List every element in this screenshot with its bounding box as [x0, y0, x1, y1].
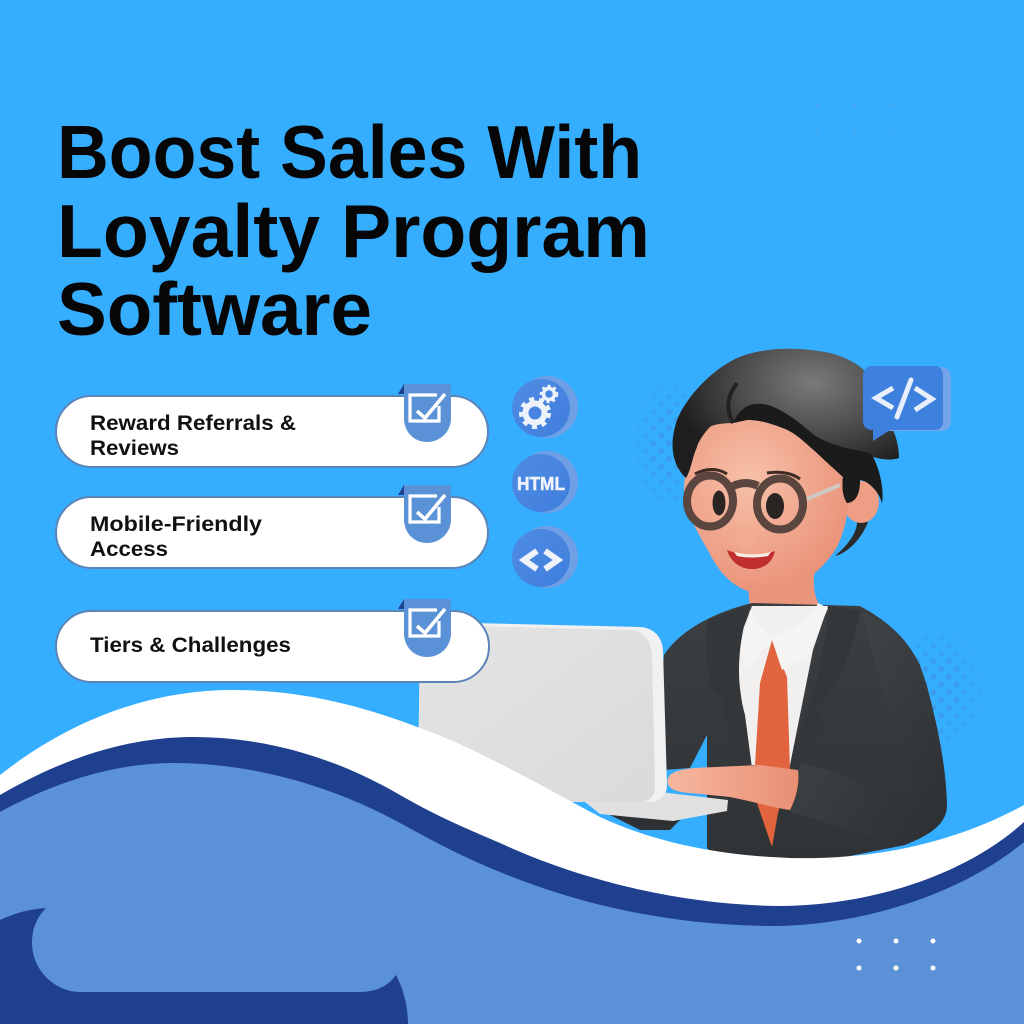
dark blue wave [0, 737, 1024, 1024]
ear [843, 481, 879, 523]
pill: Reward Referrals & Reviews [56, 384, 488, 467]
jacket body and far shoulder [661, 603, 947, 860]
white dots bottom right [856, 938, 936, 970]
pill: Mobile-Friendly Access: Mobile-Friendly [90, 512, 262, 536]
pill: Mobile-Friendly Access: Access [90, 537, 168, 561]
lower far arm [610, 810, 690, 830]
icon: code brackets [512, 526, 578, 588]
shirt [735, 606, 828, 765]
decorative faint dots top right [815, 103, 895, 135]
hand [667, 765, 798, 810]
title: Boost Sales With [57, 110, 642, 194]
hair parting fold [728, 383, 737, 423]
eyebrows [695, 470, 800, 479]
bookmark check icon [398, 384, 451, 442]
bottom-left dark shape [0, 908, 408, 1024]
lapels [706, 605, 752, 768]
pill: Tiers & Challenges: Tiers & Challenges [90, 633, 291, 657]
tie [755, 640, 790, 847]
glasses [687, 476, 803, 530]
hair [673, 349, 899, 503]
glasses temple [807, 485, 840, 499]
back hair [835, 520, 868, 556]
eyes [712, 490, 726, 516]
bookmark check icon [398, 485, 451, 543]
collar [740, 603, 828, 670]
icon: gears [512, 376, 578, 438]
illustration: person at laptop [418, 349, 947, 860]
laptop base [585, 792, 728, 821]
title: Software [57, 267, 372, 351]
halftone behind head [643, 394, 684, 493]
mouth [727, 550, 775, 569]
laptop lid face [418, 625, 655, 802]
light blue wave [0, 763, 1024, 1024]
pill: Mobile-Friendly Access [56, 485, 488, 568]
face [684, 418, 849, 595]
icon: HTML: HTML [517, 474, 565, 494]
pill: Reward Referrals & Reviews: Reviews [90, 436, 179, 460]
dark hair fringe [733, 404, 883, 503]
title [57, 110, 650, 351]
white wave [0, 690, 1024, 1024]
bubble: code icon [863, 366, 951, 441]
icon: HTML [512, 451, 578, 513]
halftone behind shoulder [916, 643, 974, 734]
jacket near sleeve [790, 612, 946, 845]
neck [748, 570, 820, 645]
pill: Tiers & Challenges [56, 599, 489, 682]
title: Loyalty Program [57, 189, 650, 273]
bookmark check icon [398, 599, 451, 657]
nose [734, 525, 756, 549]
pill: Reward Referrals & Reviews: Reward Referrals & [90, 411, 296, 435]
laptop screen rim [418, 622, 667, 802]
